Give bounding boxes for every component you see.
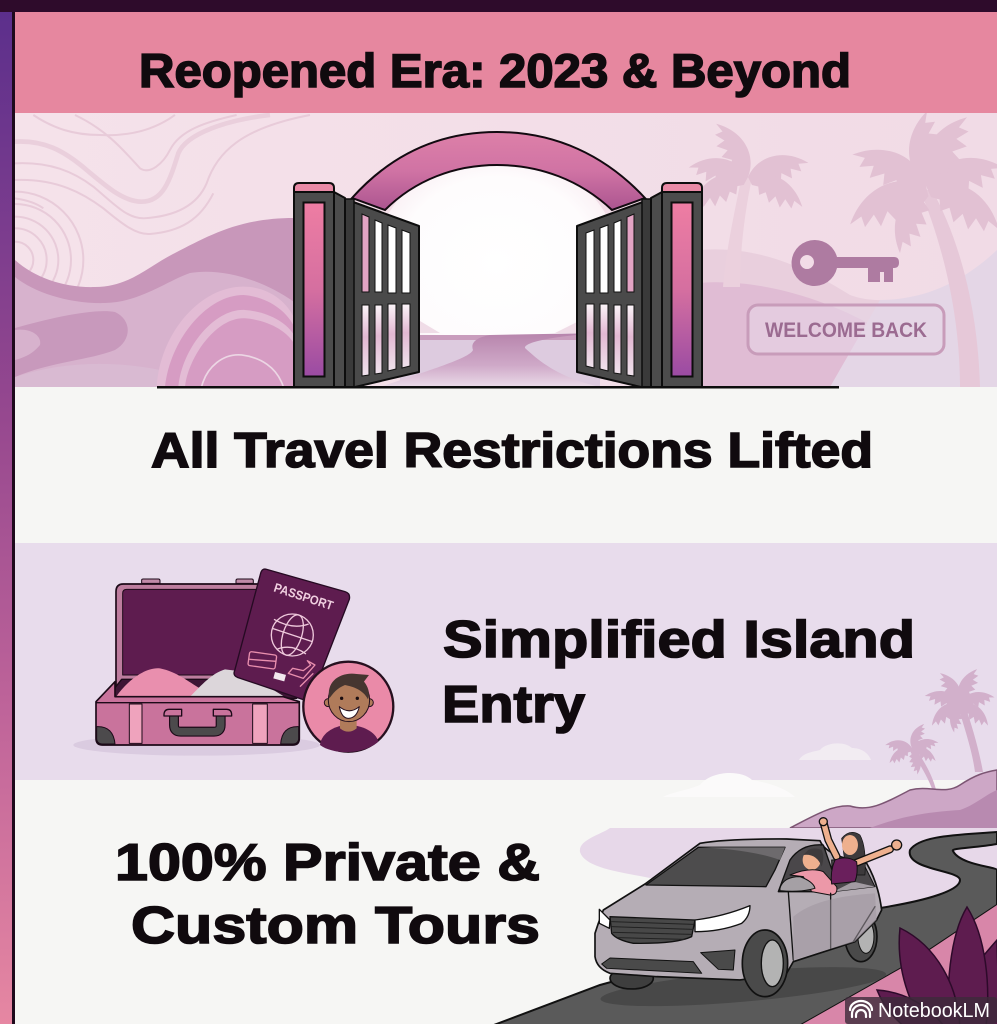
heading: simplified island entry — [442, 611, 915, 734]
palm trees — [686, 108, 997, 387]
pink roadside — [785, 905, 997, 1024]
heading: simplified island entry: Entry — [442, 676, 585, 734]
globe — [271, 612, 313, 658]
winding road — [470, 832, 997, 1024]
grille — [610, 917, 695, 943]
car body — [595, 839, 882, 980]
panel: simplified entry — [15, 543, 997, 795]
icon: notebooklm arcs — [850, 1001, 872, 1017]
heading: simplified island entry: Simplified Island — [443, 611, 915, 669]
heading: private and custom tours — [115, 834, 540, 955]
icon: car with waving passengers — [595, 818, 902, 1014]
right hills — [700, 249, 997, 387]
far wheels — [610, 968, 653, 989]
side window and driver — [778, 845, 875, 895]
glow through archway — [388, 166, 606, 335]
notebooklm badge — [845, 997, 997, 1024]
title: Reopened Era: 2023 & Beyond — [139, 44, 851, 97]
suitcase lid — [116, 579, 277, 690]
path through gate — [380, 318, 600, 387]
arch — [352, 132, 645, 210]
passenger: woman — [819, 818, 902, 884]
traveller avatar — [303, 662, 393, 752]
sea — [580, 828, 997, 912]
notebooklm badge: NotebookLM — [878, 1000, 990, 1022]
cloud — [799, 743, 871, 760]
left gradient strip — [0, 12, 15, 1024]
handle — [174, 715, 221, 732]
suitcase base — [96, 682, 299, 745]
cloud — [706, 773, 752, 780]
topographic lines — [15, 113, 310, 286]
icon: suitcase with passport and traveller — [73, 569, 393, 756]
left gate — [294, 183, 419, 387]
car shadow — [599, 959, 887, 1014]
right gate — [577, 183, 702, 387]
windshield — [646, 847, 785, 887]
passport — [234, 569, 350, 700]
front wheel — [742, 930, 788, 997]
heading: private and custom tours: 100% Private & — [115, 834, 540, 892]
heading: all travel restrictions lifted: All Travel Restrictions Lifted — [151, 424, 873, 478]
callout: welcome back: WELCOME BACK — [765, 319, 927, 342]
lower intakes — [701, 950, 735, 970]
title banner — [15, 12, 997, 113]
card and stamp — [248, 651, 315, 687]
door lines — [788, 892, 875, 960]
suitcase shadow — [73, 734, 320, 756]
headlights — [695, 906, 750, 932]
left hills — [15, 218, 295, 387]
top dark bar — [0, 0, 997, 12]
suitcase contents — [107, 668, 297, 698]
small palm trees — [885, 665, 996, 795]
rear wheel — [845, 912, 877, 962]
icon: key — [792, 240, 899, 286]
leaf plant — [877, 907, 997, 1024]
ground line — [157, 386, 839, 388]
passport: PASSPORT — [272, 581, 335, 613]
coastal hills — [790, 770, 997, 828]
heading: private and custom tours: Custom Tours — [131, 897, 540, 955]
panel: private tours — [470, 770, 997, 1024]
panel: reopened gate scene — [0, 108, 997, 387]
callout: welcome back — [748, 305, 944, 354]
